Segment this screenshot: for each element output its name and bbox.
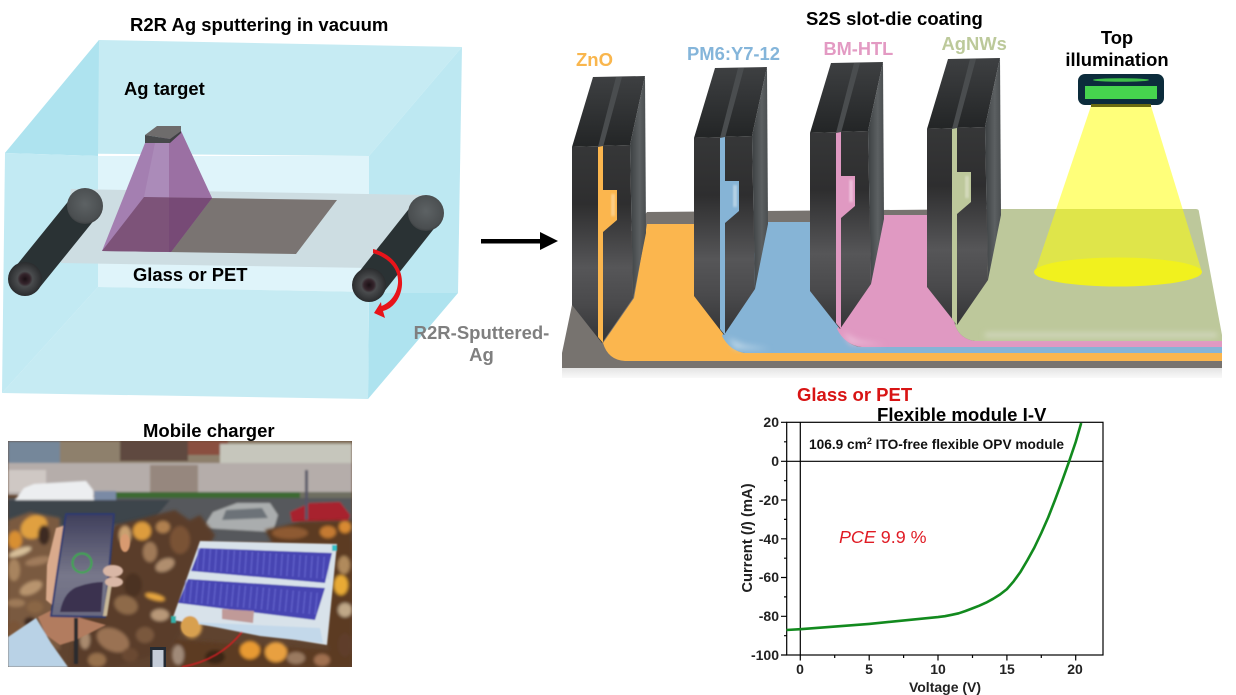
y axis tick labels: -80 xyxy=(759,608,779,624)
PCE annotation: PCE 9.9 % xyxy=(839,527,927,547)
plot frame and axes xyxy=(781,422,1103,660)
y axis tick labels: -20 xyxy=(759,492,779,508)
label: sputtered Ag: R2R-Sputtered- xyxy=(414,322,549,343)
y axis tick labels: -100 xyxy=(751,647,779,663)
substrate reflection xyxy=(562,368,1222,378)
label: top illumination: Top xyxy=(1101,27,1133,48)
label: ZnO: ZnO xyxy=(576,49,613,70)
die: PM6:Y7-12 xyxy=(694,67,768,335)
x axis tick labels: 20 xyxy=(1067,661,1083,677)
icon: illumination lamp xyxy=(1078,74,1164,107)
y axis title: Current (I) (mA) xyxy=(740,483,756,593)
rotation arrow xyxy=(373,249,402,318)
phone charger block xyxy=(150,647,166,667)
die: AgNWs xyxy=(927,58,1001,325)
Ag target block xyxy=(145,126,181,143)
label: BM-HTL: BM-HTL xyxy=(824,39,893,59)
label: Ag target: Ag target xyxy=(124,78,205,99)
light beam xyxy=(1034,106,1202,286)
translucent substrate web xyxy=(61,189,425,268)
sputtered film on substrate xyxy=(102,197,337,254)
x axis title: Voltage (V) xyxy=(909,679,981,695)
panel: I-V chart xyxy=(740,404,1103,695)
panel: R2R Ag sputtering chamber xyxy=(2,14,549,399)
module annotation: 106.9 cm xyxy=(809,437,867,452)
background scenery xyxy=(8,441,352,542)
label: sputtered Ag: Ag xyxy=(469,344,494,365)
y axis tick labels xyxy=(751,414,779,663)
I-V curve xyxy=(786,423,1081,630)
x axis tick labels: 5 xyxy=(865,661,873,677)
photo: module charging a phone xyxy=(7,441,352,667)
solar module xyxy=(171,541,337,667)
x axis tick labels: 0 xyxy=(796,661,804,677)
label: top illumination: illumination xyxy=(1065,49,1169,70)
x axis tick labels xyxy=(796,661,1083,677)
chamber back and side faces xyxy=(2,40,462,399)
heading: sputtering: R2R Ag sputtering in vacuum xyxy=(130,14,388,35)
layer: ZnO xyxy=(603,224,1222,361)
die: ZnO xyxy=(572,76,646,343)
x axis tick labels: 10 xyxy=(930,661,946,677)
layer: PM6:Y7-12 xyxy=(722,222,1222,353)
module annotation: 2 xyxy=(867,436,872,446)
layer: BM-HTL xyxy=(837,215,1222,347)
y axis tick labels: -60 xyxy=(759,569,779,585)
y axis tick labels: -40 xyxy=(759,531,779,547)
module annotation: ITO-free flexible OPV module xyxy=(872,437,1064,452)
hand and phone xyxy=(8,514,130,667)
chart title: Flexible module I-V xyxy=(877,404,1047,425)
label: AgNWs: AgNWs xyxy=(942,33,1007,54)
x axis tick labels: 15 xyxy=(999,661,1015,677)
substrate base xyxy=(562,209,1222,368)
panel: S2S slot-die coating xyxy=(562,8,1222,405)
arrow: process flow xyxy=(481,232,558,250)
heading: slot-die: S2S slot-die coating xyxy=(806,8,983,29)
layer: AgNWs xyxy=(955,209,1222,341)
label: substrate: Glass or PET xyxy=(133,264,248,285)
heading: mobile charger: Mobile charger xyxy=(143,420,275,441)
leaf hedge xyxy=(7,510,352,667)
label: PM6:Y7-12: PM6:Y7-12 xyxy=(687,43,780,64)
right roller xyxy=(352,195,444,302)
y axis tick labels: 0 xyxy=(771,453,779,469)
y axis tick labels: 20 xyxy=(763,414,779,430)
panel: mobile charger xyxy=(7,420,352,667)
coating highlights xyxy=(728,332,1217,349)
sputter plume xyxy=(102,131,212,252)
left roller xyxy=(8,188,103,296)
die: BM-HTL xyxy=(810,62,884,329)
label: substrate red: Glass or PET xyxy=(797,384,913,405)
